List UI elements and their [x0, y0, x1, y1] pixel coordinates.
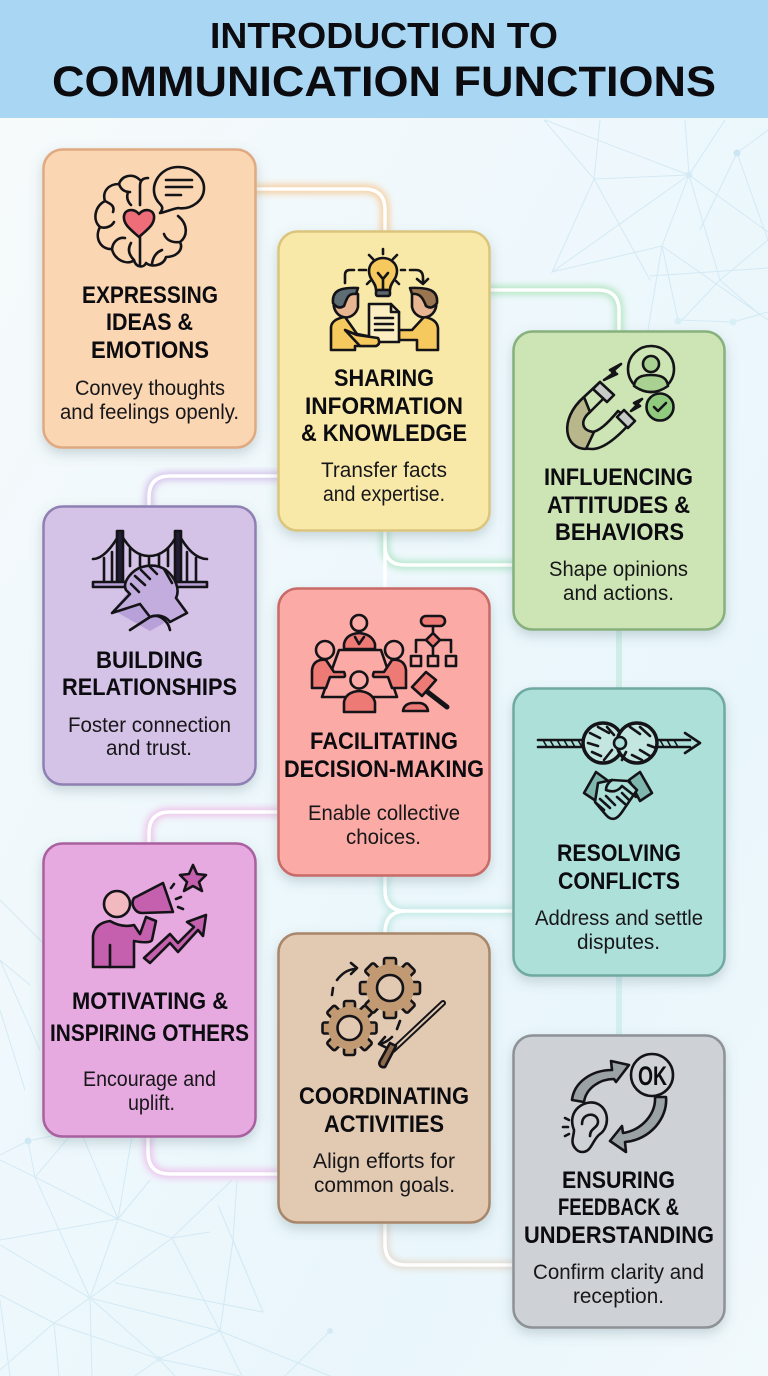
heading: INSPIRING OTHERS: [50, 1020, 249, 1047]
description: [60, 377, 239, 424]
connector: sharing to facilitating and influencing: [385, 531, 513, 588]
heading: EMOTIONS: [91, 337, 209, 364]
heading: [557, 840, 681, 895]
heading: ENSURING: [562, 1167, 675, 1194]
panel: ensuring feedback and understanding: [514, 1036, 724, 1328]
heading: IDEAS &: [106, 309, 193, 336]
heading: SHARING: [334, 365, 434, 392]
panel: resolving conflicts: [514, 688, 724, 976]
heading: INFORMATION: [305, 393, 463, 420]
heading: INFLUENCING: [544, 464, 693, 491]
description: Transfer facts: [321, 459, 447, 482]
connector: resolving to feedback: [616, 975, 622, 1035]
heading: BEHAVIORS: [555, 519, 684, 546]
connector: coordinating to feedback: [385, 1222, 513, 1265]
panel: motivating and inspiring others: [44, 844, 256, 1136]
panel: coordinating activities: [278, 934, 490, 1222]
description: [535, 907, 703, 954]
panel: expressing ideas and emotions: [44, 150, 256, 448]
panel: influencing attitudes and behaviors: [514, 332, 724, 630]
heading: MOTIVATING &: [72, 988, 228, 1015]
description: common goals.: [314, 1174, 455, 1197]
icon: knotted rope and handshake: [538, 723, 700, 819]
icon: people exchanging document under lightbulb: [331, 249, 438, 350]
description: [68, 714, 231, 760]
description: Shape opinions: [549, 558, 688, 581]
description: and expertise.: [323, 483, 445, 506]
description: [549, 558, 688, 605]
connector: motivating to coordinating: [148, 1136, 278, 1174]
icon: meeting table, flowchart and gavel: [312, 615, 456, 712]
heading: ATTITUDES &: [547, 492, 690, 519]
icon: bridge and clasped hands: [93, 531, 207, 631]
heading: DECISION-MAKING: [284, 756, 484, 783]
description: and trust.: [106, 737, 192, 760]
heading: & KNOWLEDGE: [301, 420, 467, 447]
description: [83, 1068, 216, 1115]
title: COMMUNICATION FUNCTIONS: [52, 58, 716, 106]
description: Address and settle: [535, 907, 703, 930]
description: Encourage and: [83, 1068, 216, 1091]
panel: building relationships: [44, 506, 256, 784]
heading: FEEDBACK &: [558, 1194, 679, 1221]
description: and actions.: [563, 582, 674, 605]
description: Confirm clarity and: [533, 1261, 704, 1284]
heading: [50, 988, 249, 1047]
heading: [284, 728, 484, 783]
heading: [62, 647, 237, 701]
background network: bottom left: [0, 900, 333, 1376]
icon: person with megaphone, star and rising arrow: [93, 865, 206, 967]
icon: magnet attracting person: [567, 346, 674, 449]
background network: top right: [544, 120, 768, 330]
description: Align efforts for: [313, 1150, 455, 1173]
connector: sharing to influencing: [490, 290, 619, 331]
heading: BUILDING: [96, 647, 203, 674]
description: [313, 1150, 455, 1197]
description: reception.: [573, 1285, 664, 1308]
heading: CONFLICTS: [558, 868, 680, 895]
heading: [299, 1083, 469, 1138]
heading: [301, 365, 467, 447]
heading: RELATIONSHIPS: [62, 674, 237, 701]
panel: sharing information and knowledge: [278, 232, 490, 530]
icon: feedback arrows, ear and OK badge: [563, 1054, 673, 1152]
description: [321, 459, 447, 506]
connector: influencing to resolving: [616, 629, 622, 688]
heading: [524, 1167, 714, 1249]
description: [533, 1261, 704, 1308]
connector: sharing to building relationships: [149, 476, 278, 506]
description: disputes.: [577, 931, 660, 954]
description: [308, 802, 460, 849]
heading: ACTIVITIES: [324, 1111, 444, 1138]
title: INTRODUCTION TO: [210, 15, 558, 56]
heading: RESOLVING: [557, 840, 681, 867]
heading: [82, 282, 218, 364]
panel: facilitating decision-making: [278, 588, 490, 876]
header band: [0, 0, 768, 118]
icon: brain with heart and speech bubble: [95, 167, 204, 266]
heading: UNDERSTANDING: [524, 1222, 714, 1249]
description: uplift.: [128, 1092, 175, 1115]
heading: EXPRESSING: [82, 282, 218, 309]
title: [52, 15, 716, 106]
description: choices.: [346, 826, 421, 849]
heading: FACILITATING: [310, 728, 458, 755]
description: Convey thoughts: [75, 377, 225, 400]
description: Enable collective: [308, 802, 460, 825]
connector: facilitating to resolving and coordinating: [385, 875, 513, 933]
heading: [544, 464, 693, 546]
badge text: OK: [638, 1061, 667, 1091]
heading: COORDINATING: [299, 1083, 469, 1110]
connector: expressing to sharing: [256, 189, 385, 231]
description: and feelings openly.: [60, 401, 239, 424]
connector: facilitating to motivating: [149, 812, 278, 843]
icon: gears and conductor baton: [322, 958, 443, 1067]
description: Foster connection: [68, 714, 231, 737]
